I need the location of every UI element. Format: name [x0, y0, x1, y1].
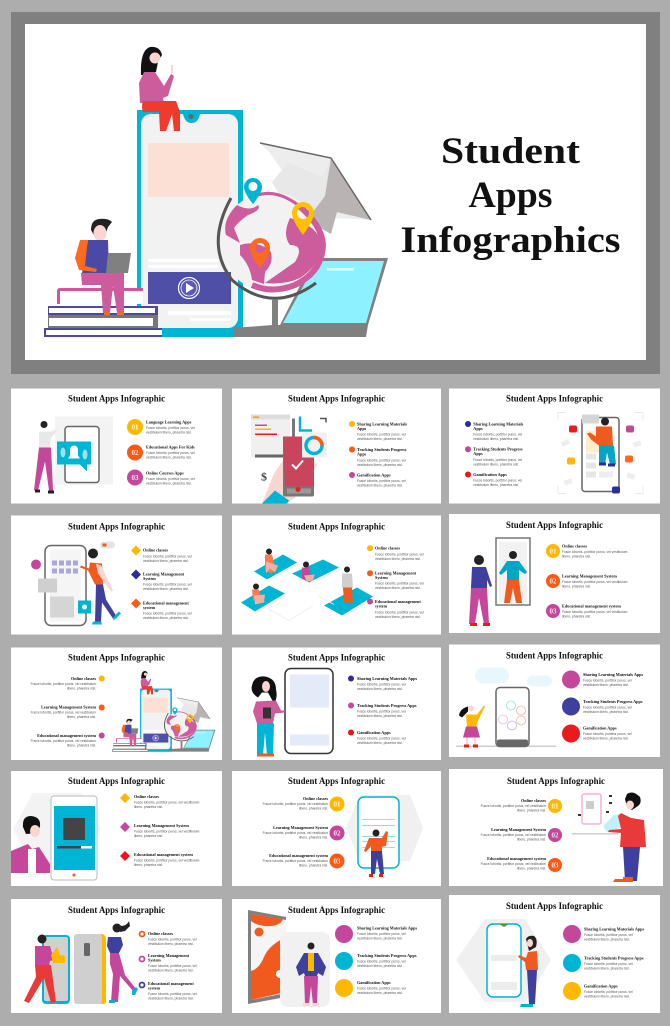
item 01: libero, pharetra nisl. — [299, 806, 328, 810]
item 1 — [349, 421, 407, 441]
item 02: Learning Management System — [562, 574, 617, 578]
item 01: Fusce lobortis, porttitor purus, vel vestibulum — [562, 550, 628, 554]
item 2: Learning Management — [143, 572, 185, 576]
item 02: Learning Management System — [273, 825, 329, 830]
item 1 — [31, 676, 105, 690]
slide title: Student Apps Infographic — [68, 394, 165, 404]
item 03 — [546, 604, 628, 618]
item 2: vestibulum libero, pharetra nisl. — [357, 964, 403, 968]
item 3: Fusce lobortis, porttitor purus, vel vestibulum — [31, 739, 96, 743]
item 3: vestibulum libero, pharetra nisl. — [583, 736, 629, 740]
item 1 — [140, 931, 197, 946]
item 3 — [335, 979, 406, 997]
item 1 — [562, 670, 644, 688]
item 2 — [465, 446, 523, 466]
panel: slide 10 — [11, 771, 222, 886]
illustration: woman presenting phone — [252, 668, 333, 756]
illustration: girl with phone and icons — [456, 668, 556, 748]
item 2: vestibulum libero, pharetra nisl. — [357, 714, 403, 718]
slide title: Student Apps Infographic — [288, 654, 385, 664]
slide title: Student Apps Infographic — [507, 777, 605, 787]
panel: slide 9 — [449, 644, 660, 757]
panel: slide 1 — [11, 388, 222, 504]
item 3: libero, pharetra nisl. — [67, 744, 96, 748]
item 2: vestibulum libero, pharetra nisl. — [583, 710, 629, 714]
item 2: Apps — [473, 451, 483, 456]
item 2: Learning Management — [148, 953, 190, 958]
phone — [137, 110, 243, 337]
item 3: vestibulum libero, pharetra nisl. — [375, 615, 421, 619]
item 02: 02 — [550, 578, 557, 586]
item 03: Online Courses Apps — [146, 470, 184, 476]
item 3 — [367, 598, 424, 619]
item 02: libero, pharetra nisl. — [562, 584, 591, 588]
item 1: Fusce lobortis, porttitor purus, vel — [148, 938, 197, 942]
item 01: vestibulum libero, pharetra nisl. — [146, 430, 192, 434]
illustration: mini students with phone and globe — [112, 671, 215, 752]
item 1: Fusce lobortis, porttitor purus, vel — [143, 554, 192, 558]
hero frame — [11, 12, 660, 374]
item 1 — [348, 676, 418, 691]
illustration: people on isometric phones — [241, 548, 373, 620]
item 2 — [31, 704, 105, 719]
item 02: Fusce lobortis, porttitor purus, vel vestibulum — [263, 831, 328, 835]
item 3 — [465, 472, 522, 487]
globe — [218, 192, 323, 326]
item 01: libero, pharetra nisl. — [562, 554, 591, 558]
item 2: Fusce lobortis, porttitor purus, vel — [357, 960, 406, 964]
person: man with laptop on books — [75, 219, 131, 315]
item 02: Fusce lobortis, porttitor purus, vel vestibulum — [481, 833, 546, 837]
slide title: Student Apps Infographic — [68, 777, 165, 787]
item 01: Fusce lobortis, porttitor purus, vel — [146, 426, 195, 430]
item 1: Fusce lobortis, porttitor purus, vel — [357, 932, 406, 936]
panel: slide 7 — [11, 648, 222, 760]
item 02: 02 — [552, 832, 559, 840]
slide title: Student Apps Infographic — [288, 906, 385, 916]
item 2: Tracking Students Progress — [357, 447, 407, 452]
item 01: Fusce lobortis, porttitor purus, vel vestibulum — [481, 804, 546, 808]
item 2 — [348, 702, 417, 718]
item 1: libero, pharetra nisl. — [134, 805, 163, 809]
item 01 — [481, 798, 562, 813]
item 1: Online classes — [71, 676, 96, 681]
item 1: Fusce lobortis, porttitor purus, vel — [473, 432, 522, 436]
item 3 — [349, 472, 406, 488]
item 03: libero, pharetra nisl. — [517, 866, 546, 870]
item 1: Fusce lobortis, porttitor purus, vel vestibulum — [31, 682, 96, 686]
item 2: vestibulum libero, pharetra nisl. — [584, 966, 630, 970]
item 2: Fusce lobortis, porttitor purus, vel — [473, 458, 522, 462]
item 3 — [348, 730, 406, 745]
item 3: vestibulum libero, pharetra nisl. — [357, 484, 403, 488]
illustration: person with video player phone — [11, 793, 101, 880]
item 01: Online classes — [303, 796, 328, 801]
item 2: vestibulum libero, pharetra nisl. — [375, 586, 421, 590]
item 2: Learning Management — [375, 570, 417, 576]
item 02 — [263, 825, 344, 840]
item 02 — [127, 444, 195, 460]
item 2: Fusce lobortis, porttitor purus, vel vestibulum — [134, 830, 200, 834]
illustration: phone notification — [34, 416, 113, 494]
item 3: Fusce lobortis, porttitor purus, vel — [473, 478, 522, 482]
item 3: Educational management system — [37, 733, 97, 738]
item 3: Gamification Apps — [473, 472, 507, 477]
item 1: Sharing Learning Materials Apps — [584, 926, 645, 932]
item 03: Fusce lobortis, porttitor purus, vel vestibulum — [562, 610, 628, 614]
item 2: System — [148, 958, 161, 962]
item 1: Online classes — [143, 548, 168, 552]
item 1: Online classes — [375, 546, 400, 550]
item 03: vestibulum libero, pharetra nisl. — [146, 482, 192, 486]
item 1: vestibulum libero, pharetra nisl. — [584, 938, 630, 942]
panel: slide 5 — [232, 516, 441, 634]
person: woman sitting on phone — [139, 47, 180, 131]
item 2: vestibulum libero, pharetra nisl. — [148, 968, 194, 972]
item 1: Fusce lobortis, porttitor purus, vel vestibulum — [134, 800, 200, 804]
hero title — [400, 131, 620, 261]
item 03: 03 — [550, 608, 557, 616]
illustration: phone in hand with charts: $ — [261, 470, 267, 484]
item 02: Learning Management System — [491, 827, 547, 832]
map pin: yellow — [292, 202, 314, 235]
slide title: Student Apps Infographic — [288, 394, 385, 404]
item 2: Learning Management System — [41, 704, 97, 710]
item 3: Fusce lobortis, porttitor purus, vel — [375, 610, 424, 614]
item 3: Fusce lobortis, porttitor purus, vel vestibulum — [134, 858, 200, 862]
item 02: Educational Apps For Kids — [146, 444, 195, 450]
item 2: Fusce lobortis, porttitor purus, vel — [584, 962, 633, 966]
item 01: 01 — [550, 548, 557, 556]
item 3: Fusce lobortis, porttitor purus, vel — [583, 732, 632, 736]
panel: slide 2 — [232, 388, 441, 504]
hero title: Student — [441, 131, 581, 172]
item 1 — [367, 545, 424, 561]
illustration: man beside tablet — [248, 910, 330, 1007]
item 1: Sharing Learning Materials Apps — [583, 672, 644, 677]
illustration: man with tablet and phone diagram — [572, 793, 646, 882]
item 01: Language Learning Apps — [146, 420, 192, 424]
item 3: Fusce lobortis, porttitor purus, vel — [357, 479, 406, 483]
item 01 — [546, 544, 628, 558]
item 3: Educational management — [148, 981, 194, 986]
item 03 — [263, 853, 344, 868]
item 2 — [367, 570, 424, 590]
item 2: Learning Management System — [134, 823, 189, 828]
item 2 — [140, 953, 197, 972]
panel: slide 13 — [11, 899, 222, 1013]
slide title: Student Apps Infographic — [288, 777, 385, 787]
item 03 — [127, 470, 195, 486]
item 3: vestibulum libero, pharetra nisl. — [584, 994, 630, 998]
item 1 — [120, 793, 200, 809]
item 3: vestibulum libero, pharetra nisl. — [143, 616, 189, 620]
item 2: Fusce lobortis, porttitor purus, vel — [357, 458, 406, 462]
slide title: Student Apps Infographic — [506, 521, 603, 531]
item 2 — [335, 952, 417, 970]
item 1: Apps — [357, 426, 367, 431]
item 2: Fusce lobortis, porttitor purus, vel — [143, 582, 192, 586]
item 03: 03 — [132, 474, 139, 482]
item 01 — [127, 419, 195, 435]
hero illustration: students, phone, globe and laptop — [44, 47, 388, 337]
item 1: Sharing Learning Materials Apps — [357, 676, 418, 681]
item 1 — [335, 925, 418, 943]
item 3: Fusce lobortis, porttitor purus, vel — [584, 990, 633, 994]
item 2 — [563, 954, 644, 972]
panel: slide 11 — [232, 771, 441, 886]
item 01: 01 — [334, 800, 341, 808]
item 2: libero, pharetra nisl. — [67, 715, 96, 719]
item 02 — [481, 827, 562, 842]
item 1: vestibulum libero, pharetra nisl. — [357, 687, 403, 691]
item 1: Apps — [473, 426, 483, 431]
item 02 — [546, 574, 628, 588]
item 3: Gamification Apps — [357, 730, 391, 735]
panel: slide 8 — [232, 648, 441, 760]
item 3: Fusce lobortis, porttitor purus, vel — [357, 736, 406, 740]
item 03: Educational management system — [487, 856, 547, 861]
item 2: vestibulum libero, pharetra nisl. — [473, 462, 519, 466]
item 02: vestibulum libero, pharetra nisl. — [146, 456, 192, 460]
item 3: libero, pharetra nisl. — [134, 863, 163, 867]
item 1: Fusce lobortis, porttitor purus, vel — [357, 432, 406, 436]
item 3: system — [143, 605, 156, 610]
item 1: Online classes — [148, 931, 173, 936]
item 03: 03 — [334, 858, 341, 866]
item 2 — [120, 822, 200, 838]
panel: slide 6 — [449, 514, 660, 633]
illustration: man touching phone on hexagon — [346, 795, 423, 877]
item 3: Fusce lobortis, porttitor purus, vel — [148, 992, 197, 996]
item 3 — [131, 598, 192, 620]
item 3: system — [148, 986, 161, 990]
item 2: Fusce lobortis, porttitor purus, vel vestibulum — [31, 710, 96, 714]
item 3: vestibulum libero, pharetra nisl. — [357, 991, 403, 995]
illustration: phone in hand with charts — [251, 414, 327, 504]
item 2: Tracking Students Progress Apps — [357, 953, 417, 958]
item 1: Fusce lobortis, porttitor purus, vel — [375, 552, 424, 556]
item 1: Fusce lobortis, porttitor purus, vel — [584, 933, 633, 937]
panel: slide 4 — [11, 516, 222, 634]
slide title: Student Apps Infographic — [288, 522, 385, 532]
item 2 — [349, 446, 407, 467]
item 3 — [120, 851, 200, 867]
item 1: vestibulum libero, pharetra nisl. — [357, 936, 403, 940]
item 02: 02 — [132, 449, 139, 457]
illustration: phone with likes — [558, 412, 643, 494]
slide title: Student Apps Infographic — [506, 902, 603, 912]
item 1: vestibulum libero, pharetra nisl. — [143, 559, 189, 563]
item 1: Sharing Learning Materials — [357, 422, 407, 426]
item 3: Educational management system — [134, 852, 193, 857]
item 1: vestibulum libero, pharetra nisl. — [583, 683, 629, 687]
item 03: Educational management system — [562, 604, 621, 608]
item 1: Fusce lobortis, porttitor purus, vel — [357, 682, 406, 686]
hero title: Infographics — [400, 220, 620, 261]
item 01: Online classes — [521, 798, 546, 803]
item 03: libero, pharetra nisl. — [299, 864, 328, 868]
panel: slide 3 — [449, 388, 660, 504]
item 1: vestibulum libero, pharetra nisl. — [357, 437, 403, 441]
item 03 — [481, 856, 562, 872]
item 3: Gamification Apps — [357, 980, 391, 985]
laptop — [233, 258, 388, 337]
stack of books — [44, 288, 233, 337]
item 2: Fusce lobortis, porttitor purus, vel — [375, 582, 424, 586]
item 01: Fusce lobortis, porttitor purus, vel vestibulum — [263, 802, 328, 806]
item 02: libero, pharetra nisl. — [517, 838, 546, 842]
item 01: libero, pharetra nisl. — [517, 808, 546, 812]
map pin: orange — [250, 238, 270, 268]
item 3: vestibulum libero, pharetra nisl. — [148, 996, 194, 1000]
slide title: Student Apps Infographic — [506, 652, 603, 662]
item 03: libero, pharetra nisl. — [562, 614, 591, 618]
item 01: 01 — [132, 424, 139, 432]
item 2: vestibulum libero, pharetra nisl. — [357, 463, 403, 467]
item 2: Fusce lobortis, porttitor purus, vel — [357, 710, 406, 714]
item 01: 01 — [552, 802, 559, 810]
slide title: Student Apps Infographic — [68, 906, 165, 916]
item 03: Fusce lobortis, porttitor purus, vel vestibulum — [263, 859, 328, 863]
item 03: Fusce lobortis, porttitor purus, vel vestibulum — [481, 862, 546, 866]
item 03: Fusce lobortis, porttitor purus, vel — [146, 477, 195, 481]
item 2: libero, pharetra nisl. — [134, 834, 163, 838]
item 3: Gamification Apps — [584, 984, 618, 988]
item 1: Sharing Learning Materials Apps — [357, 926, 418, 930]
item 2 — [562, 698, 643, 716]
hero title: Apps — [468, 175, 552, 216]
item 3: Gamification Apps — [357, 472, 391, 478]
item 2 — [131, 570, 192, 591]
item 02: libero, pharetra nisl. — [299, 836, 328, 840]
item 2: Tracking Students Progress — [473, 446, 523, 452]
slide title: Student Apps Infographic — [68, 522, 165, 532]
item 02: Fusce lobortis, porttitor purus, vel vestibulum — [562, 580, 628, 584]
illustration: man and woman on video call — [469, 538, 530, 626]
item 2: System — [143, 576, 156, 581]
item 3 — [31, 732, 105, 748]
item 3 — [562, 724, 632, 742]
item 1 — [465, 421, 524, 441]
item 2: Tracking Students Progress Apps — [357, 703, 417, 708]
item 3 — [563, 982, 633, 1000]
item 01 — [263, 796, 344, 812]
slide title: Student Apps Infographic — [68, 654, 165, 664]
item 2: Tracking Students Progress Apps — [583, 699, 643, 704]
item 02: 02 — [334, 830, 341, 838]
illustration: two women with phones — [24, 921, 138, 1004]
item 03: 03 — [552, 862, 559, 870]
panel: slide 15 — [449, 895, 660, 1013]
item 3: Gamification Apps — [583, 726, 617, 730]
item 1 — [131, 546, 192, 563]
item 3: Educational management — [375, 599, 421, 604]
item 2: vestibulum libero, pharetra nisl. — [143, 587, 189, 591]
item 2: System — [375, 575, 388, 580]
item 1: Online classes — [134, 794, 159, 799]
map pin: blue — [244, 178, 262, 204]
item 2: Fusce lobortis, porttitor purus, vel — [583, 706, 632, 710]
item 3: vestibulum libero, pharetra nisl. — [357, 741, 403, 745]
item 3 — [140, 981, 197, 1000]
item 1: Sharing Learning Materials — [473, 422, 524, 426]
item 3: vestibulum libero, pharetra nisl. — [473, 483, 519, 487]
item 2: Apps — [357, 452, 367, 456]
item 3: Fusce lobortis, porttitor purus, vel — [143, 612, 192, 616]
illustration: man beside phone on hexagon — [456, 919, 551, 1007]
slide title: Student Apps Infographic — [506, 394, 603, 404]
item 2: Fusce lobortis, porttitor purus, vel — [148, 964, 197, 968]
item 3: Educational management — [143, 600, 189, 606]
item 1 — [563, 925, 645, 943]
item 1: libero, pharetra nisl. — [67, 686, 96, 690]
illustration: woman using app grid — [31, 542, 121, 626]
item 1: vestibulum libero, pharetra nisl. — [375, 557, 421, 561]
panel: slide 12 — [449, 769, 663, 886]
item 2: Tracking Students Progress Apps — [584, 956, 644, 960]
item 1: Fusce lobortis, porttitor purus, vel — [583, 678, 632, 682]
item 1: vestibulum libero, pharetra nisl. — [148, 942, 194, 946]
item 03: Educational management system — [269, 853, 329, 858]
panel: slide 14 — [232, 899, 441, 1013]
item 1: vestibulum libero, pharetra nisl. — [473, 437, 519, 441]
item 01: Online classes — [562, 544, 587, 548]
item 02: Fusce lobortis, porttitor purus, vel — [146, 451, 195, 455]
item 3: Fusce lobortis, porttitor purus, vel — [357, 986, 406, 990]
item 3: system — [375, 604, 388, 608]
graduation cap — [260, 143, 371, 234]
